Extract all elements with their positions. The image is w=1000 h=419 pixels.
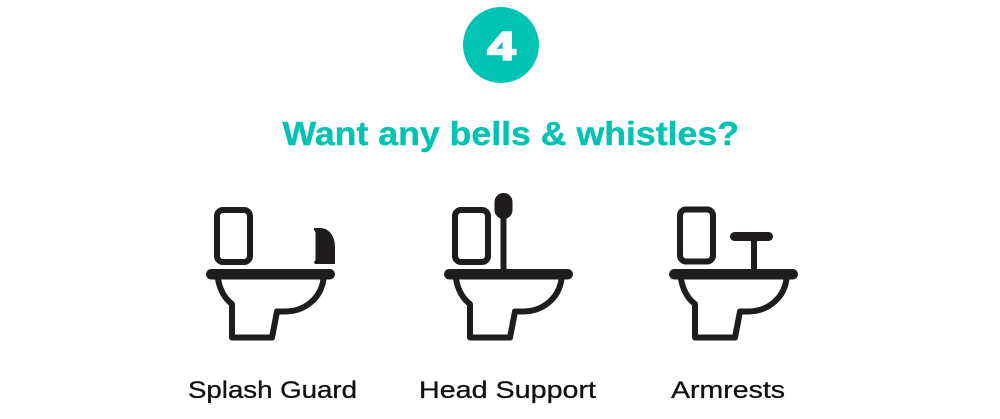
label: armrests: Armrests xyxy=(671,377,785,404)
icon: toilet with armrests xyxy=(669,210,798,338)
icon: toilet with head support xyxy=(444,193,573,338)
icon: toilet with splash guard xyxy=(206,210,335,338)
label: splash guard: Splash Guard xyxy=(188,377,357,404)
title: Want any bells & whistles? xyxy=(282,116,739,153)
step number badge xyxy=(463,7,539,83)
step number badge: 4 xyxy=(488,26,516,68)
label: head support: Head Support xyxy=(419,377,596,404)
